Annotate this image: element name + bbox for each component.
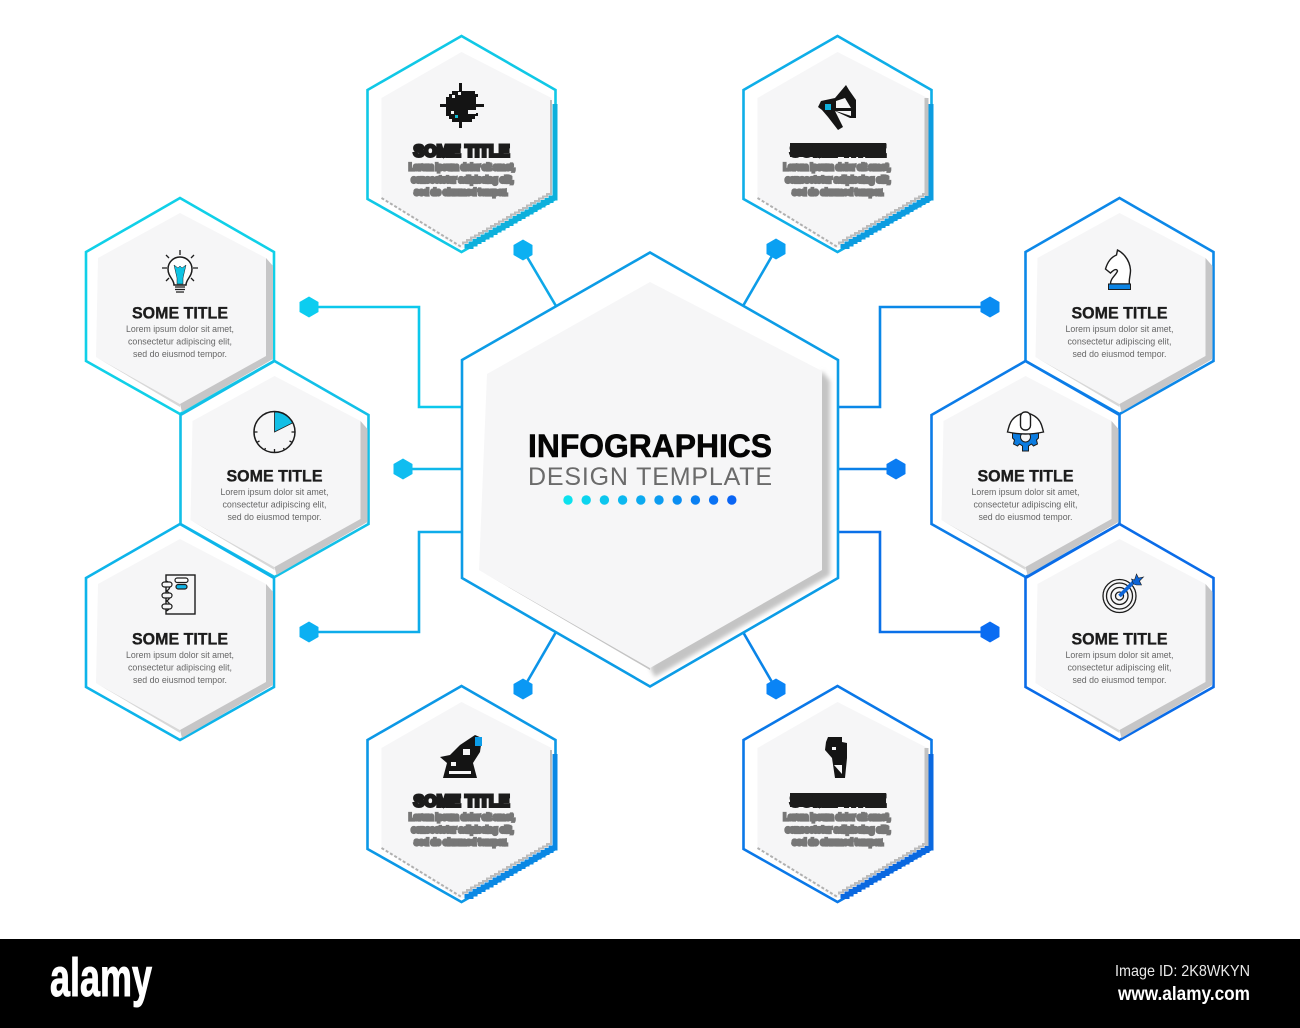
title: SOME TITLE [132, 630, 228, 648]
body text: consectetur adipiscing elit, [412, 174, 514, 184]
body text: Lorem ipsum dolor sit amet, [1066, 650, 1174, 660]
body text: consectetur adipiscing elit, [128, 662, 232, 672]
image id: Image ID: 2K8WKYN [1115, 963, 1250, 980]
connector: left bottom [300, 532, 462, 642]
body text: consectetur adipiscing elit, [786, 174, 890, 184]
body text [1066, 650, 1174, 685]
title: SOME TITLE [132, 304, 228, 322]
body text: consectetur adipiscing elit, [1068, 336, 1172, 346]
panel: right middle card [932, 361, 1120, 577]
connector: top right [743, 238, 786, 306]
title: SOME TITLE [414, 142, 510, 160]
body text: sed do eiusmod tempor. [133, 349, 227, 359]
connector: bottom right [743, 632, 786, 700]
connector: right middle [838, 458, 906, 480]
footer bar [0, 939, 1300, 1028]
panel: bottom left card (pixelated) [368, 686, 556, 902]
body text: consectetur adipiscing elit, [974, 500, 1078, 510]
dotted divider [563, 495, 736, 505]
body text: sed do eiusmod tempor. [792, 837, 884, 847]
body text: Lorem ipsum dolor sit amet, [784, 162, 890, 172]
icon: pixelated virus [440, 83, 484, 128]
body text [220, 487, 328, 522]
body text [972, 487, 1080, 522]
subheading: design template: DESIGN TEMPLATE [528, 463, 772, 491]
panel: top left card (pixelated) [368, 36, 556, 252]
body text: Lorem ipsum dolor sit amet, [784, 812, 890, 822]
body text: consectetur adipiscing elit, [786, 824, 890, 834]
body text [126, 324, 234, 359]
connector: left top [300, 296, 462, 407]
body text: Lorem ipsum dolor sit amet, [220, 487, 328, 497]
title: SOME TITLE [226, 466, 322, 486]
body text: sed do eiusmod tempor. [792, 187, 884, 197]
body text: Lorem ipsum dolor sit amet, [409, 812, 515, 822]
icon: light bulb [162, 250, 198, 292]
title: SOME TITLE [1072, 304, 1168, 322]
panel: left middle card [180, 361, 368, 577]
body text: consectetur adipiscing elit, [222, 500, 326, 510]
body text: sed do eiusmod tempor. [228, 512, 322, 522]
panel: center hexagon [462, 252, 838, 686]
icon: chess knight [1106, 250, 1130, 290]
title: SOME TITLE [1072, 630, 1168, 648]
icon: target with dart [1103, 574, 1144, 612]
body text: sed do eiusmod tempor. [414, 837, 508, 847]
title: SOME TITLE [978, 466, 1074, 486]
title: SOME TITLE [790, 792, 886, 810]
panel: right top card [1026, 198, 1214, 414]
icon: pixelated chess piece [825, 737, 847, 778]
body text: Lorem ipsum dolor sit amet, [126, 650, 234, 660]
body text: sed do eiusmod tempor. [133, 675, 227, 685]
body text: sed do eiusmod tempor. [1072, 349, 1166, 359]
panel: left bottom card [86, 524, 274, 740]
body text: sed do eiusmod tempor. [1072, 675, 1166, 685]
connector: bottom left [514, 632, 556, 700]
body text: sed do eiusmod tempor. [978, 512, 1072, 522]
connector: right top [838, 296, 1000, 407]
panel: top right card (pixelated) [744, 36, 932, 252]
body text: Lorem ipsum dolor sit amet, [409, 162, 515, 172]
connector: right bottom [838, 532, 1000, 642]
panel: bottom right card (pixelated) [744, 686, 932, 902]
panel: right bottom card [1026, 524, 1214, 740]
body text [784, 162, 890, 197]
body text [784, 812, 890, 847]
connector: left middle [394, 458, 462, 480]
icon: helmet and gear [1008, 412, 1044, 451]
icon: pixelated megaphone [818, 85, 856, 130]
heading: infographics: INFOGRAPHICS [528, 428, 772, 464]
body text [126, 650, 234, 685]
connector: top left [514, 240, 556, 306]
body text: Lorem ipsum dolor sit amet, [1066, 324, 1174, 334]
icon: pixelated rocking chair [440, 735, 482, 778]
title: SOME TITLE [414, 792, 510, 810]
body text: consectetur adipiscing elit, [412, 824, 514, 834]
body text [1066, 324, 1174, 359]
title: SOME TITLE [790, 142, 886, 160]
icon: clock [254, 412, 295, 452]
website: www.alamy.com [1117, 984, 1250, 1005]
body text: sed do eiusmod tempor. [414, 187, 508, 197]
panel: left top card [86, 198, 274, 414]
body text: Lorem ipsum dolor sit amet, [126, 324, 234, 334]
footer logo: alamy [50, 948, 152, 1008]
body text: Lorem ipsum dolor sit amet, [972, 487, 1080, 497]
body text [409, 162, 515, 197]
body text [409, 812, 515, 847]
icon: notebook [162, 575, 195, 614]
body text: consectetur adipiscing elit, [1068, 662, 1172, 672]
body text: consectetur adipiscing elit, [128, 336, 232, 346]
